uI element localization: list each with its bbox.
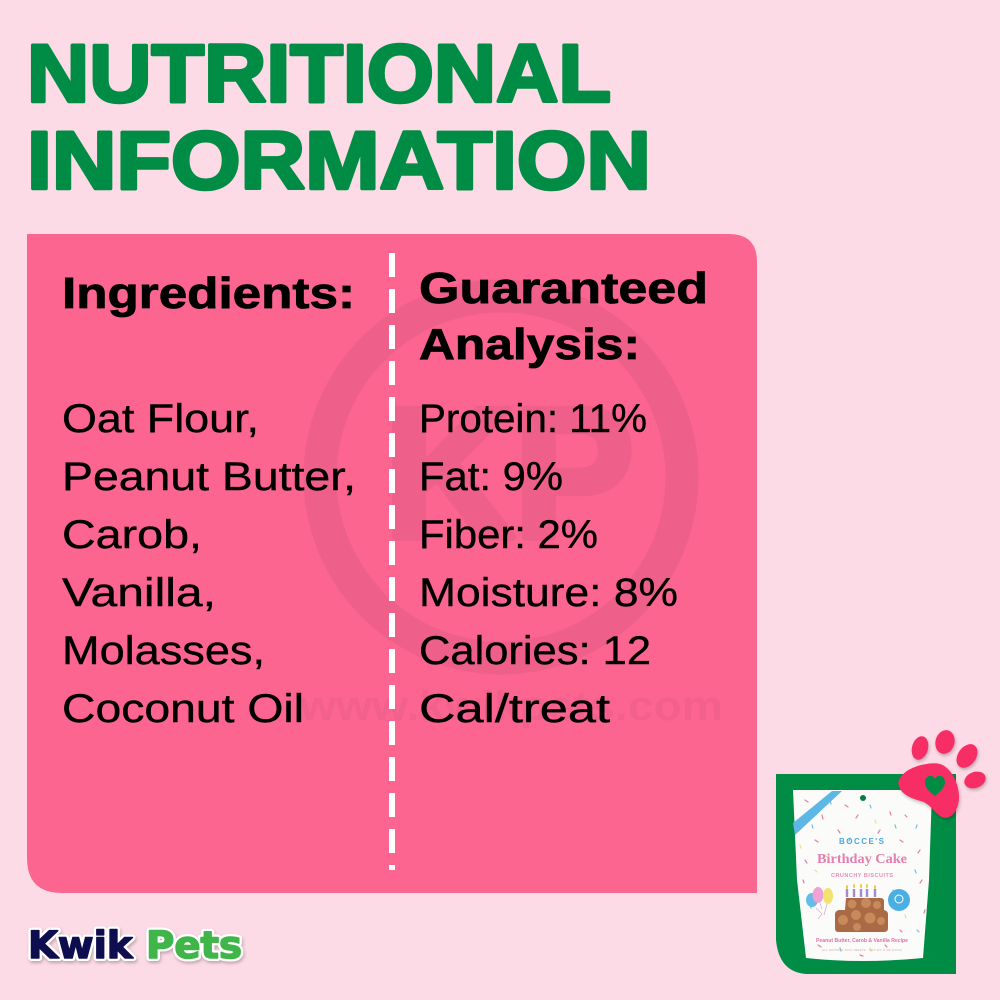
- ingredients list: Carob,: [62, 513, 202, 557]
- ingredients list: Vanilla,: [62, 571, 216, 615]
- product card: [776, 728, 988, 974]
- guaranteed analysis list: Moisture: 8%: [419, 571, 678, 615]
- guaranteed analysis list: Calories: 12: [419, 629, 651, 673]
- panel: nutrition facts: [27, 234, 757, 893]
- product name: Birthday Cake: [817, 851, 907, 866]
- guaranteed analysis list: Fiber: 2%: [419, 513, 598, 557]
- weight line: ALL NATURAL DOG TREATS · NET WT. 6 OZ (170G): [822, 948, 902, 952]
- subtitle: CRUNCHY BISCUITS: [831, 873, 893, 879]
- ingredients list: Peanut Butter,: [62, 455, 356, 499]
- title: [27, 28, 651, 206]
- panel background: [27, 234, 757, 893]
- watermark: www.kwikpets.com: [299, 682, 723, 729]
- guaranteed analysis heading: Analysis:: [419, 320, 640, 369]
- green backing: [776, 774, 956, 974]
- wheat free ribbon: [793, 791, 842, 835]
- ingredients heading: Ingredients:: [62, 269, 355, 318]
- ingredients list: Oat Flour,: [62, 397, 259, 441]
- recipe line: Peanut Butter, Carob & Vanilla Recipe: [816, 938, 908, 944]
- guaranteed analysis list: [419, 397, 678, 731]
- guaranteed analysis list: Cal/treat: [419, 687, 610, 731]
- heart cutout: [925, 776, 945, 796]
- guaranteed analysis list: Fat: 9%: [419, 455, 563, 499]
- guaranteed analysis heading: Guaranteed: [419, 264, 708, 313]
- ingredients list: Molasses,: [62, 629, 265, 673]
- cake window: [835, 885, 888, 932]
- icon: paw with heart: [898, 728, 988, 818]
- balloons: [806, 887, 833, 919]
- watermark: [299, 296, 723, 729]
- ingredients list: [62, 397, 356, 731]
- guaranteed analysis heading: [419, 264, 708, 369]
- brand name: BOCCE'S: [839, 837, 885, 846]
- logo: Kwik Pets: Kwik Pets: [28, 924, 242, 967]
- guaranteed analysis list: Protein: 11%: [419, 397, 647, 441]
- title: NUTRITIONAL: [27, 28, 611, 120]
- blue badge: [888, 889, 910, 911]
- confetti: [800, 800, 925, 956]
- watermark: KP: [384, 371, 634, 577]
- logo: Kwik Pets: Kwik Pets: [28, 924, 242, 967]
- product bag: [793, 790, 932, 961]
- ingredients list: Coconut Oil: [62, 687, 304, 731]
- column divider: [389, 253, 395, 870]
- title: INFORMATION: [27, 116, 651, 206]
